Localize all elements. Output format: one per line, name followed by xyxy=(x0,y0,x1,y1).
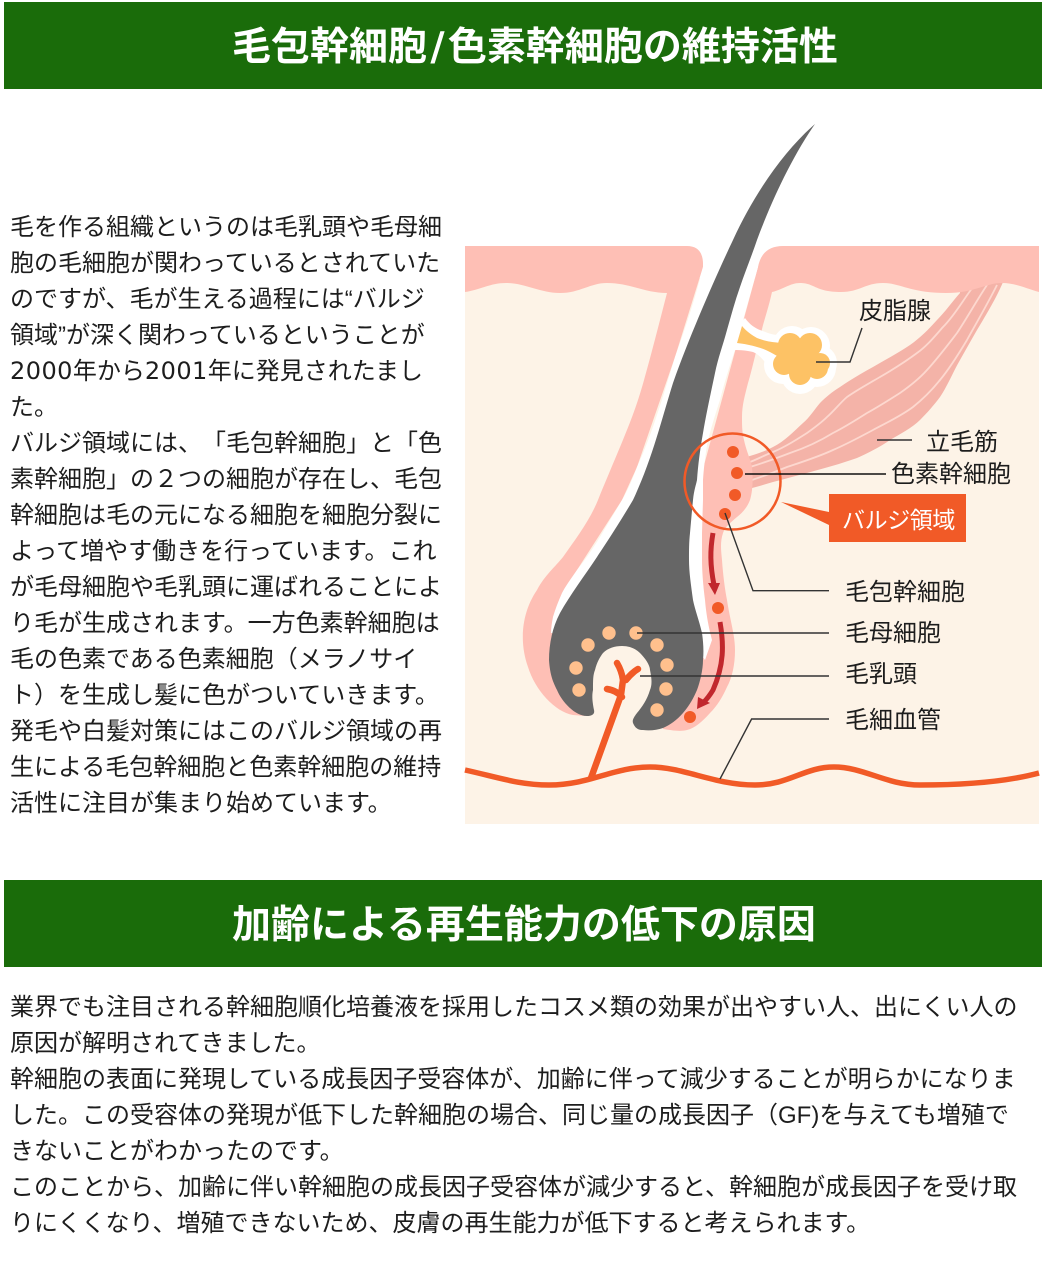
text block: bulge region explanation: 毛の色素である色素細胞（メラノサイ xyxy=(10,646,417,673)
text block: cause explanation: 業界でも注目される幹細胞順化培養液を採用したコスメ類の効果が出やすい人、出にくい人の xyxy=(10,994,1018,1021)
text block: bulge region explanation: 2000年から2001年に発見されたまし xyxy=(10,357,423,385)
white channel around hair xyxy=(551,250,758,660)
text block: bulge region explanation: ト）を生成し髪に色がついていきます。 xyxy=(10,682,439,709)
text block: bulge region explanation: 生による毛包幹細胞と色素幹細胞の維持 xyxy=(10,754,441,781)
hair shaft and bulb xyxy=(549,124,815,730)
text block: bulge region explanation: 領域”が深く関わっているということが xyxy=(10,322,425,349)
text block: bulge region explanation: り毛が生成されます。一方色素幹細胞は xyxy=(10,610,440,637)
text block: bulge region explanation: 毛を作る組織というのは毛乳頭や毛母細 xyxy=(10,214,442,241)
bulge region circle xyxy=(684,434,780,530)
callout: bulge region xyxy=(781,494,966,542)
text block: bulge region explanation: た。 xyxy=(10,394,58,421)
heading: cause of decline: 加齢による再生能力の低下の原因 xyxy=(232,904,816,947)
heading: stem cell maintenance: 毛包幹細胞/色素幹細胞の維持活性 xyxy=(232,25,838,70)
text block: cause explanation: このことから、加齢に伴い幹細胞の成長因子受容体が減少すると、幹細胞が成長因子を受け取 xyxy=(10,1174,1017,1201)
text block: cause explanation: 幹細胞の表面に発現している成長因子受容体が、加齢に伴って減少することが明らかになりま xyxy=(10,1066,1016,1093)
text block: bulge region explanation: 幹細胞は毛の元になる細胞を細胞分裂に xyxy=(10,502,442,529)
label: hair follicle stem cell: 毛包幹細胞 xyxy=(845,579,965,606)
text block: bulge region explanation: のですが、毛が生える過程には“バルジ xyxy=(10,286,425,313)
sebaceous gland and duct xyxy=(732,318,837,394)
skin background xyxy=(465,278,1039,824)
label: dermal papilla: 毛乳頭 xyxy=(845,661,917,688)
skin band and follicle sheath, right xyxy=(663,246,1039,731)
arrector pili muscle xyxy=(735,275,1006,492)
text block: cause explanation xyxy=(10,994,1018,1237)
label: matrix cell: 毛母細胞 xyxy=(845,620,941,647)
text block: bulge region explanation: 胞の毛細胞が関わっているとされていた xyxy=(10,250,440,277)
text block: cause explanation: きないことがわかったのです。 xyxy=(10,1138,344,1165)
text block: bulge region explanation: 発毛や白髪対策にはこのバルジ領域の再 xyxy=(10,718,442,745)
label: melanocyte stem cell: 色素幹細胞 xyxy=(891,461,1011,488)
orange stem cell dots xyxy=(684,446,743,723)
text block: bulge region explanation: よって増やす働きを行っています。これ xyxy=(10,538,436,565)
label: arrector pili: 立毛筋 xyxy=(926,429,998,456)
text block: cause explanation: 原因が解明されてきました。 xyxy=(10,1030,321,1057)
label: sebaceous gland: 皮脂腺 xyxy=(859,298,931,325)
heading: cause of decline xyxy=(4,880,1042,967)
migration arrow upper xyxy=(708,533,720,595)
text block: bulge region explanation xyxy=(10,214,442,817)
text block: cause explanation: りにくくなり、増殖できないため、皮膚の再生能力が低下すると考えられます。 xyxy=(10,1210,870,1237)
text block: cause explanation: した。この受容体の発現が低下した幹細胞の場合、同じ量の成長因子（GF)を与えても増殖で xyxy=(10,1102,1009,1129)
text block: bulge region explanation: バルジ領域には、「毛包幹細胞」と「色 xyxy=(10,430,442,457)
capillary branch xyxy=(591,663,638,778)
text block: bulge region explanation: 活性に注目が集まり始めています。 xyxy=(10,790,392,817)
text block: bulge region explanation: 素幹細胞」の２つの細胞が存在し、毛包 xyxy=(10,466,442,493)
skin band and follicle sheath, left xyxy=(465,246,703,716)
callout: bulge region: バルジ領域 xyxy=(842,507,955,533)
text block: bulge region explanation: が毛母細胞や毛乳頭に運ばれることによ xyxy=(10,574,442,601)
capillary vessel xyxy=(465,767,1039,785)
migration arrow lower xyxy=(697,622,722,709)
label: capillary: 毛細血管 xyxy=(845,707,941,734)
matrix cell dots xyxy=(569,626,674,717)
heading: stem cell maintenance xyxy=(4,2,1042,89)
leader lines xyxy=(637,328,912,779)
